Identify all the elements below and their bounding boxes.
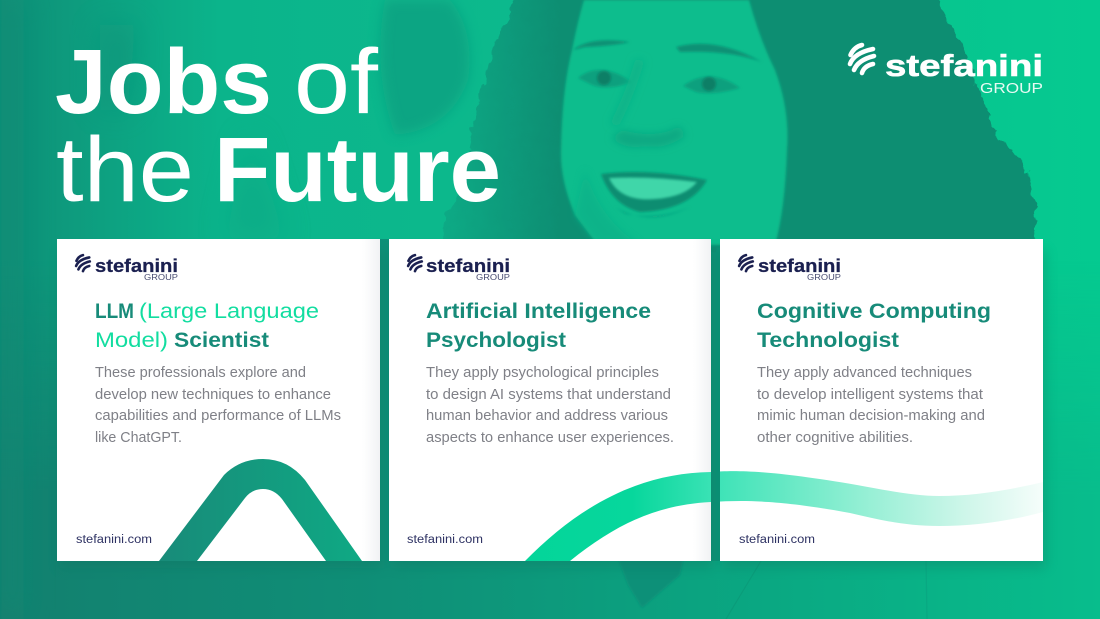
eyebrows — [573, 40, 630, 50]
title: of — [294, 31, 378, 133]
description: to design AI systems that understand — [426, 387, 671, 403]
card logo — [76, 255, 178, 282]
face — [561, 0, 788, 245]
logo: stefanini group (white): GROUP — [980, 80, 1043, 97]
logo: stefanini group (white): stefanini — [885, 48, 1043, 83]
title: Future — [214, 119, 501, 221]
card shadows — [60, 250, 1046, 568]
card logo: GROUP — [144, 273, 178, 282]
title: the — [56, 119, 194, 221]
wave ribbon across cards — [525, 471, 1043, 561]
card logo: GROUP — [807, 273, 841, 282]
heading — [95, 300, 319, 352]
title — [55, 31, 501, 221]
gutter strips between cards — [380, 239, 389, 440]
heading: LLM — [95, 300, 134, 323]
description: human behavior and address various — [426, 408, 668, 424]
heading — [426, 300, 651, 352]
title: Jobs — [55, 31, 272, 133]
logo: stefanini group (white) — [850, 45, 1043, 97]
description: capabilities and performance of LLMs — [95, 408, 341, 424]
panel: Cognitive Computing Technologist — [720, 239, 1043, 561]
heading — [757, 300, 991, 352]
arch graphic — [159, 459, 362, 561]
heading: Technologist — [757, 329, 899, 352]
footer url: stefanini.com — [407, 534, 483, 546]
description: aspects to enhance user experiences. — [426, 430, 674, 446]
description: They apply advanced techniques — [757, 365, 972, 381]
heading: Model) — [95, 329, 168, 352]
neck and garment folds below cards — [620, 561, 682, 607]
description: develop new techniques to enhance — [95, 387, 331, 403]
heading: Psychologist — [426, 329, 566, 352]
description — [95, 365, 341, 446]
heading: Artificial Intelligence — [426, 300, 651, 323]
description: like ChatGPT. — [95, 430, 182, 446]
nose shadow — [612, 127, 685, 147]
card logo: stefanini — [95, 256, 178, 276]
description: other cognitive abilities. — [757, 430, 913, 446]
footer url: stefanini.com — [739, 534, 815, 546]
hair — [442, 0, 1036, 250]
panel: Artificial Intelligence Psychologist — [389, 239, 711, 561]
card logo — [408, 255, 510, 282]
icon: globe — [850, 45, 874, 73]
description — [757, 365, 985, 446]
description: These professionals explore and — [95, 365, 306, 381]
footer url: stefanini.com — [76, 534, 152, 546]
smile — [601, 172, 707, 212]
card logo — [739, 255, 841, 282]
heading: Cognitive Computing — [757, 300, 991, 323]
heading: Scientist — [174, 329, 269, 352]
description: mimic human decision-making and — [757, 408, 985, 424]
card logo: stefanini — [758, 256, 841, 276]
card logo: stefanini — [426, 256, 510, 276]
description — [426, 365, 674, 446]
heading: (Large Language — [139, 300, 319, 323]
card logo: GROUP — [476, 273, 510, 282]
description: to develop intelligent systems that — [757, 387, 983, 403]
panel: LLM Scientist — [57, 239, 380, 561]
description: They apply psychological principles — [426, 365, 659, 381]
eyes — [578, 70, 632, 88]
